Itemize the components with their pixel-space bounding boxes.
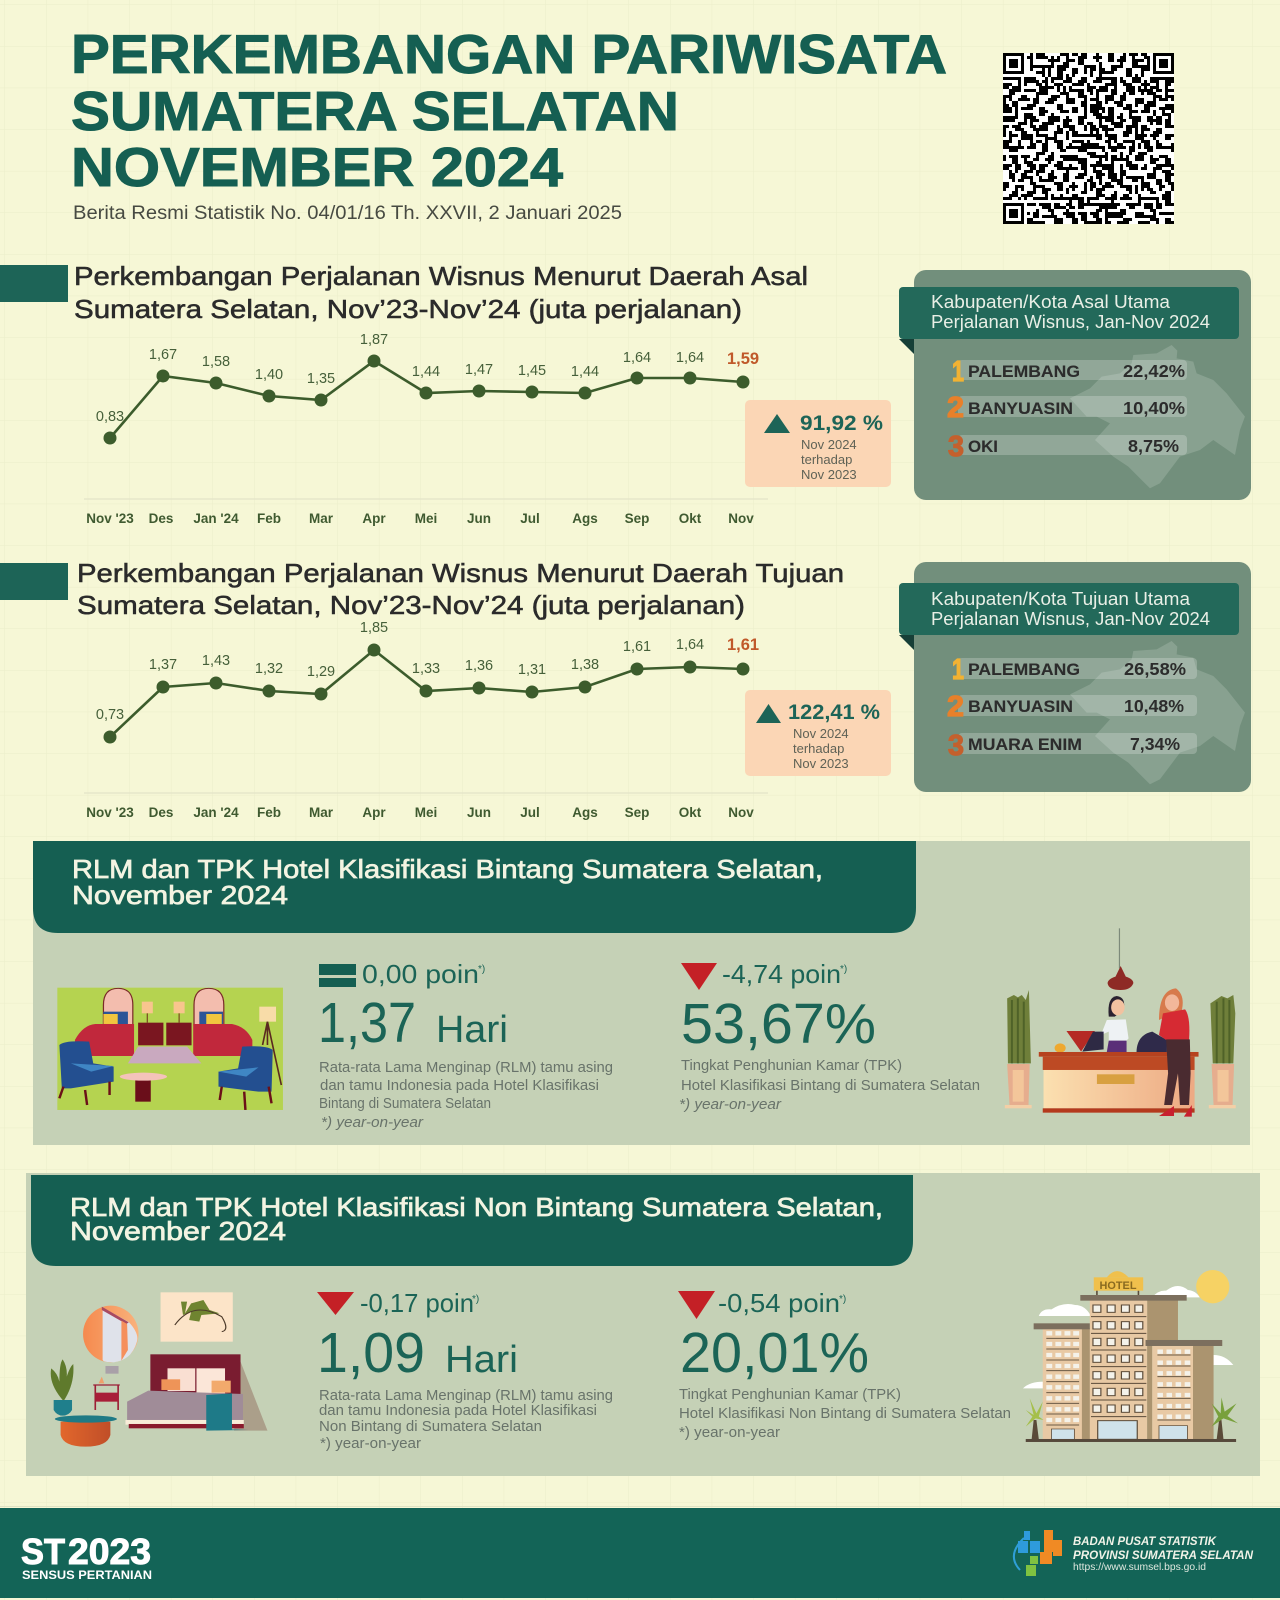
heading: destination chart: Perkembangan Perjalanan Wisnus Menurut Daerah Tujuan (77, 558, 844, 588)
indicator: star RLM: *) (478, 964, 485, 975)
panel: top destination regions: 2 (947, 691, 964, 723)
indicator: non-star TPK: Hotel Klasifikasi Non Bintang di Sumatera Selatan (679, 1406, 1011, 1422)
callout: origin growth: Nov 2024 (801, 437, 857, 452)
line chart: destination: Okt (679, 805, 702, 820)
logo: ST2023 (21, 1531, 152, 1582)
line chart: destination: 1,61 (727, 636, 759, 654)
indicator: star RLM: Bintang di Sumatera Selatan (319, 1096, 491, 1112)
line chart: destination: 1,37 (149, 657, 177, 673)
panel: top origin regions: BANYUASIN (968, 399, 1073, 418)
indicator: star RLM: Rata-rata Lama Menginap (RLM) tamu asing (319, 1060, 613, 1076)
line chart: destination: 1,61 (623, 639, 651, 655)
line chart: origin: 1,64 (676, 350, 704, 366)
panel: top destination regions: 7,34% (1130, 734, 1180, 754)
logo: BPS: https://www.sumsel.bps.go.id (1073, 1562, 1206, 1573)
line chart: origin: Des (149, 511, 173, 526)
line chart: origin: Sep (625, 511, 649, 526)
line chart: origin: 1,59 (727, 350, 759, 368)
heading: origin chart: Perkembangan Perjalanan Wisnus Menurut Daerah Asal (74, 261, 808, 291)
indicator: non-star TPK: -0,54 poin (718, 1288, 840, 1318)
line chart: destination: Nov '23 (86, 805, 134, 820)
line chart: destination: Nov (728, 805, 754, 820)
logo: BPS (1014, 1530, 1254, 1576)
callout: origin growth: Nov 2023 (801, 467, 857, 482)
indicator: non-star RLM: *) year-on-year (320, 1436, 421, 1452)
line chart: origin: 1,87 (360, 332, 388, 348)
line chart: destination: Feb (257, 805, 281, 820)
line chart: destination: 1,64 (676, 637, 704, 653)
line chart: origin: Okt (679, 511, 702, 526)
panel: non-star hotels (26, 1173, 1260, 1476)
line chart: origin: 1,67 (149, 347, 177, 363)
panel: star hotels: RLM dan TPK Hotel Klasifikasi Bintang Sumatera Selatan, (72, 854, 823, 884)
line chart: destination: 1,85 (360, 620, 388, 636)
line chart: destination: 1,36 (465, 658, 493, 674)
line chart: origin: Ags (572, 511, 598, 526)
logo: BPS: BADAN PUSAT STATISTIK (1073, 1536, 1217, 1548)
indicator: non-star TPK: *) year-on-year (679, 1425, 780, 1441)
logo: ST2023: ST (21, 1531, 65, 1572)
title (71, 23, 947, 198)
callout: destination growth (745, 690, 891, 776)
indicator: star TPK: 53,67% (681, 992, 876, 1056)
title: SUMATERA SELATAN (71, 80, 679, 142)
section marker: origin (0, 265, 68, 302)
panel: top origin regions: OKI (968, 437, 998, 456)
logo: ST2023: SENSUS PERTANIAN (22, 1568, 152, 1582)
line chart: origin: 1,35 (307, 371, 335, 387)
panel: top origin regions: 2 (947, 392, 964, 424)
line chart: origin: 1,44 (412, 364, 440, 380)
panel: top destination regions: Kabupaten/Kota Tujuan Utama (931, 589, 1191, 609)
QR code (1003, 53, 1174, 224)
panel: top destination regions: MUARA ENIM (968, 735, 1082, 754)
indicator: star TPK: Tingkat Penghunian Kamar (TPK) (681, 1058, 902, 1074)
indicator: non-star RLM: dan tamu Indonesia pada Hotel Klasifikasi (319, 1403, 597, 1419)
line chart: destination: Mar (309, 805, 334, 820)
line chart: destination: 1,32 (255, 661, 283, 677)
line chart: origin: 1,58 (202, 354, 230, 370)
callout: destination growth: Nov 2024 (793, 726, 849, 741)
indicator: non-star TPK (678, 1288, 1011, 1441)
line chart: destination: 1,31 (518, 662, 546, 678)
line chart: destination: 1,33 (412, 661, 440, 677)
icon: hotel building illustration: HOTEL (1100, 1280, 1137, 1292)
line chart: origin: Nov (728, 511, 754, 526)
panel: non-star hotels: RLM dan TPK Hotel Klasifikasi Non Bintang Sumatera Selatan, (70, 1192, 883, 1222)
indicator: non-star RLM: Non Bintang di Sumatera Selatan (319, 1419, 542, 1435)
line chart: destination: Mei (415, 805, 437, 820)
panel: top destination regions: 10,48% (1124, 696, 1184, 716)
section marker: destination (0, 563, 68, 600)
heading: origin chart: Sumatera Selatan, Nov’23-Nov’24 (juta perjalanan) (74, 294, 742, 324)
panel: top origin regions: 3 (948, 431, 964, 463)
indicator: star TPK: Hotel Klasifikasi Bintang di Sumatera Selatan (681, 1078, 980, 1094)
indicator: star RLM (318, 959, 613, 1131)
heading: destination chart: Sumatera Selatan, Nov’23-Nov’24 (juta perjalanan) (77, 590, 745, 620)
line chart: destination: Jan '24 (193, 805, 239, 820)
icon: hotel building illustration (1023, 1270, 1238, 1442)
line chart: origin: 1,40 (255, 367, 283, 383)
indicator: non-star RLM: Rata-rata Lama Menginap (RLM) tamu asing (319, 1388, 613, 1404)
indicator: non-star RLM: 1,09 (317, 1321, 425, 1385)
line chart: destination: Apr (362, 805, 386, 820)
line chart: origin: Nov '23 (86, 511, 134, 526)
line chart: destination: Sep (625, 805, 649, 820)
panel: top origin regions: 10,40% (1123, 398, 1185, 418)
panel: top origin regions: PALEMBANG (968, 362, 1080, 381)
panel: star hotels (33, 841, 1250, 1145)
heading: origin chart (74, 261, 808, 324)
indicator: star TPK: *) year-on-year (679, 1097, 782, 1113)
panel: top destination regions: BANYUASIN (968, 697, 1073, 716)
line chart: origin: Jan '24 (193, 511, 239, 526)
line chart: origin: Jun (467, 511, 491, 526)
indicator: non-star TPK: *) (839, 1294, 846, 1305)
line chart: destination: Jun (467, 805, 491, 820)
indicator: non-star TPK: Tingkat Penghunian Kamar (TPK) (679, 1387, 901, 1403)
panel: star hotels: November 2024 (72, 880, 288, 910)
panel: top origin regions: 1 (952, 356, 964, 388)
callout: origin growth (745, 400, 891, 487)
line chart: origin: 0,83 (96, 409, 124, 425)
callout: destination growth: Nov 2023 (793, 756, 849, 771)
line chart: destination (84, 620, 768, 820)
line chart: destination: Jul (520, 805, 540, 820)
title: PERKEMBANGAN PARIWISATA (71, 23, 947, 85)
indicator: star RLM: Hari (436, 1009, 508, 1051)
icon: guest room illustration (57, 988, 283, 1110)
title: NOVEMBER 2024 (71, 136, 563, 198)
footer band (0, 1506, 1280, 1598)
panel: top destination regions: Perjalanan Wisnus, Jan-Nov 2024 (931, 609, 1210, 629)
indicator: non-star RLM (317, 1288, 613, 1452)
line chart: origin (84, 332, 768, 526)
line chart: origin: Mar (309, 511, 334, 526)
indicator: star TPK (679, 959, 980, 1113)
line chart: origin: Jul (520, 511, 540, 526)
callout: origin growth: 91,92 % (800, 412, 883, 435)
line chart: origin: 1,47 (465, 362, 493, 378)
subtitle: Berita Resmi Statistik No. 04/01/16 Th. XXVII, 2 Januari 2025 (73, 203, 622, 224)
panel: top origin regions: 8,75% (1128, 436, 1179, 456)
logo: ST2023: 2023 (68, 1531, 151, 1572)
line chart: destination: 1,38 (571, 657, 599, 673)
panel: non-star hotels: November 2024 (70, 1216, 286, 1246)
line chart: origin: Mei (415, 511, 437, 526)
panel: top destination regions: 26,58% (1124, 659, 1186, 679)
panel: top origin regions: 22,42% (1123, 361, 1185, 381)
indicator: star RLM: 1,37 (318, 991, 416, 1055)
panel: top origin regions (899, 270, 1251, 500)
line chart: destination: 1,43 (202, 653, 230, 669)
logo: BPS: PROVINSI SUMATERA SELATAN (1073, 1550, 1254, 1562)
callout: origin growth: terhadap (801, 452, 852, 467)
line chart: destination: Ags (572, 805, 598, 820)
line chart: origin: Apr (362, 511, 386, 526)
line chart: origin: Feb (257, 511, 281, 526)
panel: top destination regions: 1 (952, 654, 964, 686)
panel: top destination regions (899, 562, 1251, 792)
panel: top origin regions: Kabupaten/Kota Asal Utama (931, 292, 1171, 312)
icon: bedroom illustration (51, 1292, 267, 1447)
indicator: non-star RLM: *) (472, 1294, 479, 1305)
line chart: origin: 1,45 (518, 363, 546, 379)
indicator: star RLM: 0,00 poin (362, 959, 479, 989)
indicator: non-star TPK: 20,01% (680, 1321, 869, 1385)
panel: top destination regions: PALEMBANG (968, 660, 1080, 679)
indicator: star TPK: -4,74 poin (722, 959, 841, 989)
line chart: origin: 1,44 (571, 364, 599, 380)
panel: top origin regions: Perjalanan Wisnus, Jan-Nov 2024 (931, 312, 1210, 332)
callout: destination growth: 122,41 % (788, 701, 880, 724)
indicator: non-star RLM: -0,17 poin (360, 1288, 474, 1318)
line chart: destination: 1,29 (307, 664, 335, 680)
panel: top destination regions: 3 (948, 730, 964, 762)
callout: destination growth: terhadap (793, 741, 844, 756)
line chart: destination: Des (149, 805, 173, 820)
indicator: non-star RLM: Hari (445, 1339, 518, 1381)
icon: hotel reception illustration (1005, 928, 1236, 1117)
indicator: star RLM: *) year-on-year (321, 1115, 424, 1131)
indicator: star TPK: *) (840, 964, 847, 975)
line chart: origin: 1,64 (623, 350, 651, 366)
indicator: star RLM: dan tamu Indonesia pada Hotel Klasifikasi (320, 1078, 599, 1094)
line chart: destination: 0,73 (96, 707, 124, 723)
heading: destination chart (77, 558, 844, 620)
